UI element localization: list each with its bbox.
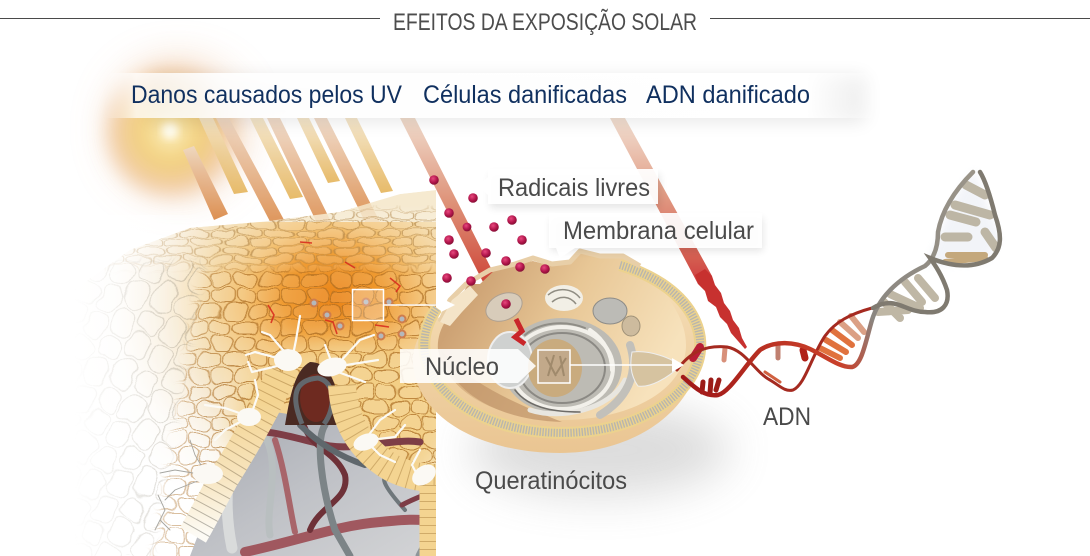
cell outer rim — [413, 260, 701, 453]
icon: sun glow — [102, 62, 242, 202]
nucleus — [528, 339, 582, 397]
UV rays — [183, 118, 393, 238]
header banner — [105, 73, 885, 122]
grey vessel loop in follicle — [296, 378, 332, 424]
cell drop shadow — [470, 404, 730, 496]
skin cell texture — [94, 205, 436, 556]
skin surface — [185, 190, 436, 230]
callout: nucleus — [400, 349, 684, 383]
free radicals — [429, 175, 550, 309]
follicle interior — [300, 374, 332, 422]
banner label: damaged DNA: ADN danificado — [646, 81, 810, 109]
title: EFEITOS DA EXPOSIÇÃO SOLAR — [393, 9, 697, 36]
panel: skin cross-section — [92, 190, 436, 556]
jagged red beam end — [695, 269, 747, 349]
pigment granules — [310, 298, 406, 340]
DNA base pairs — [693, 185, 996, 393]
organelle: golgi shell — [545, 285, 583, 311]
DNA helix — [677, 170, 1000, 395]
torn membrane edge — [440, 251, 640, 322]
melanocytes — [155, 316, 440, 530]
organelle left — [488, 332, 532, 388]
keratinocyte cell — [413, 251, 701, 453]
torn cream fragment — [440, 286, 478, 326]
DNA strand two — [683, 172, 973, 395]
cell membrane — [424, 265, 700, 433]
banner label: UV damage: Danos causados pelos UV — [131, 81, 402, 109]
skin cell base colour — [130, 222, 436, 464]
UV ray to DNA — [610, 118, 747, 349]
callout: cell membrane — [549, 213, 763, 258]
inflamed red cell gaps — [268, 242, 400, 334]
callout: free radicals: Radicais livres — [498, 174, 650, 202]
cell lower brown shading — [441, 350, 562, 422]
basal cell layers — [193, 372, 436, 556]
organelle: vesicle — [481, 287, 527, 327]
cell cytoplasm — [438, 253, 686, 420]
organelle: mitochondria — [593, 298, 640, 336]
callout: cell membrane: Membrana celular — [563, 217, 754, 245]
warm yellow layer around follicle — [218, 322, 436, 464]
banner label: damaged cells: Células danificadas — [423, 81, 627, 109]
dermis — [190, 410, 436, 556]
label: keratinocytes: Queratinócitos — [475, 467, 627, 495]
white fade on left — [93, 228, 204, 407]
DNA strand one — [677, 308, 872, 390]
callout: nucleus: Núcleo — [425, 353, 499, 381]
blood vessels — [222, 425, 424, 556]
label: DNA: ADN — [763, 403, 811, 431]
damage jag — [515, 319, 525, 344]
DNA upper glow — [925, 170, 1000, 266]
DNA strand three — [873, 172, 1000, 312]
callout: skin detail box with arrow — [352, 290, 455, 320]
callout: free radicals — [478, 169, 660, 208]
nucleus envelope — [502, 318, 633, 415]
UV ray to free radicals — [400, 118, 512, 306]
hair follicle — [285, 362, 336, 425]
DNA unravelling shell — [631, 352, 680, 386]
